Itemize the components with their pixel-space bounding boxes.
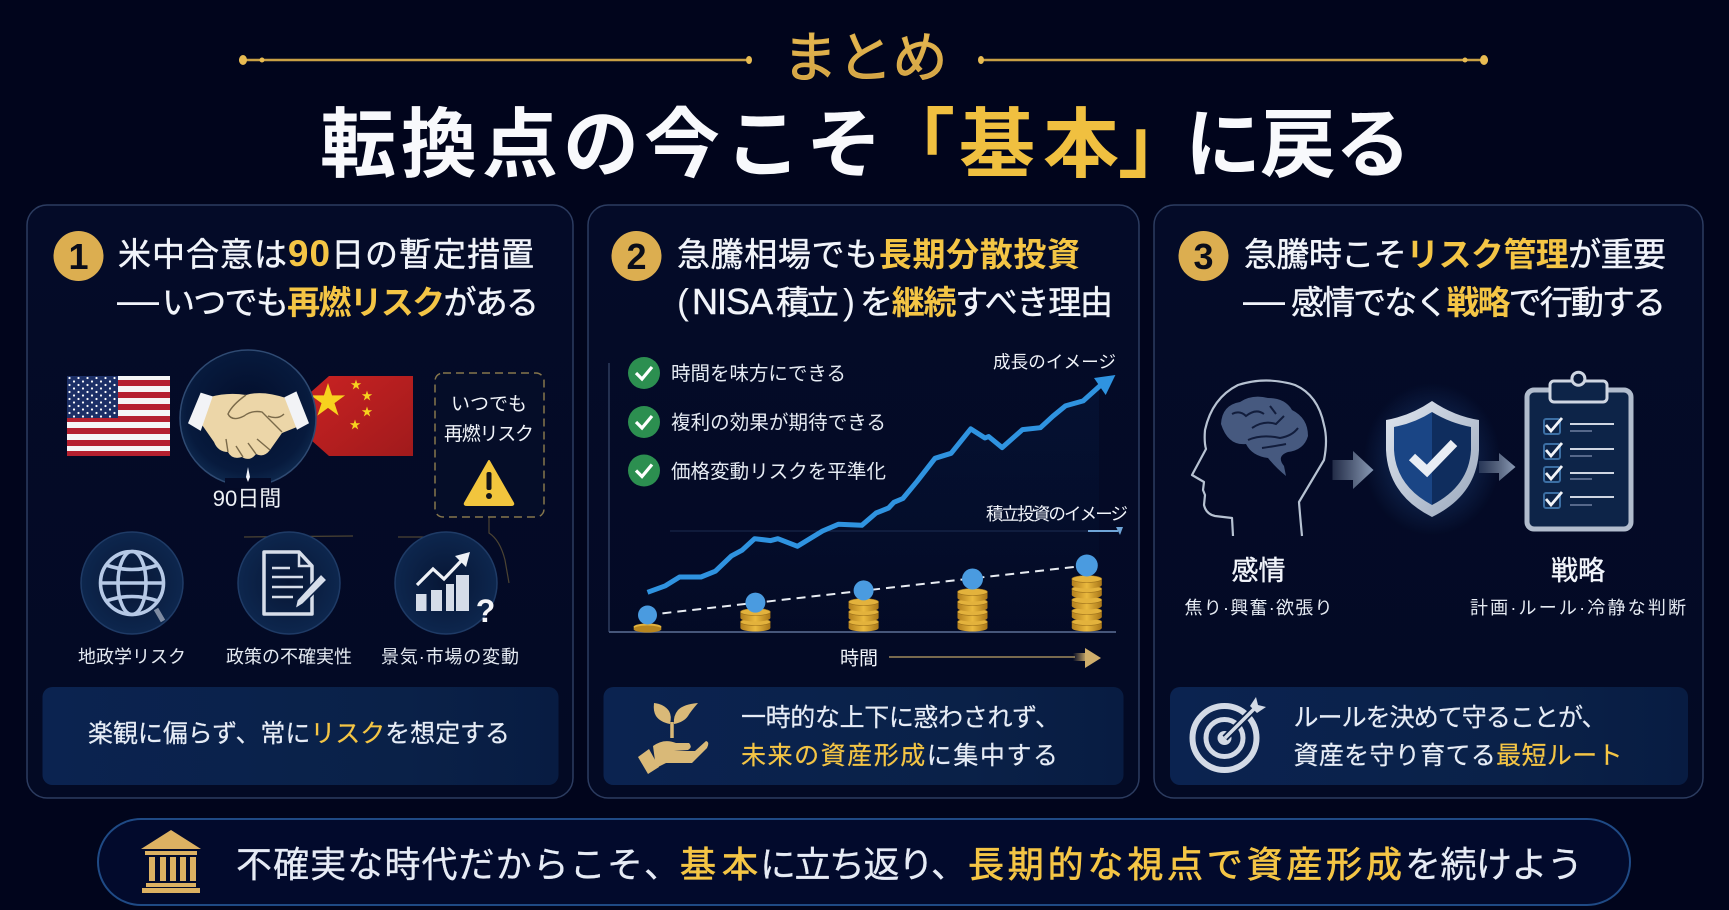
faint gold connector lines — [244, 517, 509, 583]
icon: handshake in circle — [180, 350, 316, 488]
closing message: 長期的な視点で資産形成 — [968, 844, 1402, 885]
icon: bank building — [141, 830, 201, 893]
callout: always reignition risk — [435, 373, 544, 517]
heading 2: NISA — [692, 281, 773, 322]
badge 1: 1 — [68, 236, 89, 277]
heading 2: 急騰相場でも長期分散投資 — [677, 236, 1080, 273]
heading 3: 感情でなく戦略で行動する — [1291, 284, 1666, 321]
callout panel 3 — [1170, 687, 1688, 785]
time axis arrow: 時間 — [840, 648, 878, 670]
badge 2: 2 — [626, 236, 647, 277]
heading 1: いつでも再燃リスクがある — [162, 284, 539, 321]
label: strategy: 戦略 — [1551, 556, 1605, 586]
label: emotion: 焦り·興奮·欲張り — [1184, 598, 1332, 618]
check list: 複利の効果が期待できる — [671, 412, 886, 434]
badge 1 — [54, 231, 104, 281]
icon: clipboard checklist — [1527, 372, 1631, 529]
callout panel 3: 資産を守り育てる最短ルート — [1294, 742, 1622, 770]
bottom banner — [98, 819, 1630, 905]
main title: 「 — [879, 103, 955, 188]
label: 90 days: 90日間 — [213, 486, 281, 511]
icon: sprout in hand — [638, 703, 708, 774]
heading 2: ( — [677, 281, 689, 322]
badge 3: 3 — [1193, 236, 1214, 277]
main title — [320, 103, 1411, 188]
callout panel 2: 一時的な上下に惑わされず、 — [741, 704, 1060, 732]
closing message: 不確実な時代だからこそ、 — [236, 844, 680, 885]
icon: US flag — [67, 376, 170, 456]
arrow: shield to clipboard — [1479, 453, 1516, 481]
heading 1: 米中合意は90日の暫定措置 — [118, 233, 534, 274]
badge 3 — [1178, 231, 1228, 281]
coin stacks — [634, 576, 1102, 632]
closing message: に立ち返り、 — [760, 844, 967, 885]
heading 2: を継続すべき理由 — [860, 284, 1113, 321]
heading 1 — [117, 233, 539, 323]
label: economy and market moves: 景気·市場の変動 — [381, 647, 519, 667]
main title: 」 — [1118, 103, 1194, 188]
icon: target with arrow — [1192, 697, 1266, 770]
label: growth image: 成長のイメージ — [993, 352, 1116, 372]
check list: 価格変動リスクを平準化 — [671, 461, 886, 483]
dashed accumulation line with dots — [638, 554, 1098, 624]
callout: always reignition risk: いつでも — [451, 394, 527, 415]
label: accumulation image — [986, 504, 1128, 535]
label: emotion: 感情 — [1232, 556, 1286, 586]
closing message: を続けよう — [1405, 844, 1583, 885]
callout panel 2: 未来の資産形成に集中する — [741, 742, 1058, 770]
heading 2 — [677, 236, 1113, 322]
icon: shield with check — [1364, 383, 1500, 535]
callout panel 1: 楽観に偏らず、常にリスクを想定する — [88, 720, 510, 748]
callout panel 3: ルールを決めて守ることが、 — [1294, 704, 1606, 732]
header label: まとめ: まとめ — [782, 27, 948, 89]
check list: 時間を味方にできる — [671, 363, 846, 385]
icon: globe — [81, 532, 183, 634]
icon: head with brain — [1192, 380, 1326, 536]
panel 1: US-China agreement risk — [27, 205, 573, 798]
icon: document with pencil — [238, 532, 340, 634]
icon: market chart with question mark — [395, 532, 497, 634]
main title: 転換点の今こそ — [320, 103, 882, 188]
callout panel 1 — [42, 687, 558, 785]
heading 1: — — [117, 276, 159, 323]
heading 3: 急騰時こそリスク管理が重要 — [1244, 236, 1666, 273]
callout panel 2 — [604, 687, 1124, 785]
main title: 基本 — [959, 103, 1119, 188]
heading 2: ) — [843, 281, 855, 322]
chart axes — [609, 363, 1116, 632]
arrow: emotion to shield — [1332, 451, 1374, 489]
label: policy uncertainty: 政策の不確実性 — [226, 647, 352, 667]
badge 2 — [612, 231, 662, 281]
panel 2: long-term investing — [588, 205, 1139, 798]
icon: China flag — [311, 376, 413, 456]
check list — [628, 357, 886, 486]
callout: always reignition risk: 再燃リスク — [444, 423, 534, 445]
time axis arrow — [840, 648, 1101, 670]
heading 3 — [1243, 236, 1666, 323]
label: strategy — [1470, 556, 1686, 618]
main title: に戻る — [1185, 103, 1411, 188]
closing message: 基本 — [680, 844, 758, 885]
heading 2: 積立 — [776, 284, 839, 321]
growth line chart — [647, 375, 1115, 632]
closing message — [236, 844, 1583, 885]
header label: まとめ — [239, 27, 1488, 89]
label: strategy: 計画·ルール·冷静な判断 — [1470, 598, 1686, 618]
label: emotion — [1184, 556, 1332, 618]
label: accumulation image: 積立投資のイメージ — [986, 504, 1128, 524]
heading 3: — — [1243, 276, 1285, 323]
icon: market chart with question mark: ? — [476, 593, 495, 629]
label: geopolitical risk: 地政学リスク — [78, 647, 186, 667]
panel 3: risk management — [1154, 205, 1703, 798]
